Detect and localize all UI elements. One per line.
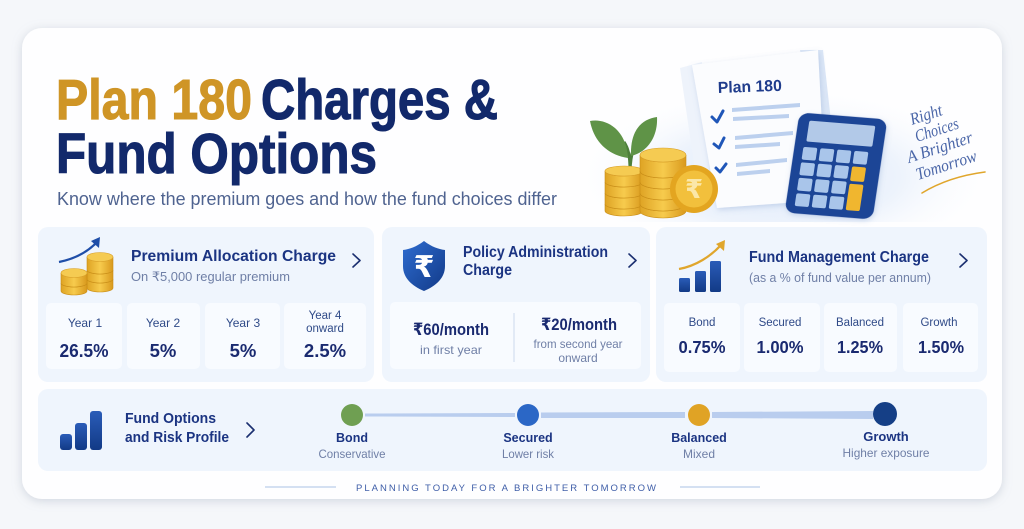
note: (as a % of fund value per annum) (749, 271, 931, 285)
fund: bond (318, 404, 386, 461)
heading: Premium Allocation Charge (131, 248, 336, 265)
title: Fund Options (56, 122, 377, 186)
icon: rupee shield (403, 241, 445, 291)
cell: year 4 onward: 2.5% (304, 340, 346, 361)
panel: fund options and risk profile (38, 389, 987, 471)
fee: first year (413, 320, 489, 357)
title (56, 68, 498, 186)
coin stacks (605, 148, 686, 218)
heading (125, 410, 229, 446)
rupee coin: ₹ (685, 174, 703, 204)
fund: growth: Growth (863, 429, 909, 444)
document: Plan 180 (718, 78, 782, 97)
note: On ₹5,000 regular premium (131, 269, 290, 284)
chevron (629, 254, 636, 267)
icon: bars (60, 411, 102, 450)
cell: year 2 (127, 303, 200, 369)
cell: year 2: 5% (150, 340, 176, 361)
subtitle: Know where the premium goes and how the fund choices differ (57, 188, 557, 209)
cell: bond: Bond (689, 317, 715, 329)
fund: bond: Bond (336, 431, 368, 445)
heading: Fund Management Charge (749, 249, 929, 266)
fee: second year onward: onward (558, 351, 598, 365)
handwritten tagline: A Brighter (903, 128, 975, 167)
heading: Policy Administration (463, 244, 608, 261)
fee box (390, 302, 641, 369)
handwritten tagline (903, 100, 980, 184)
cell: year 4 onward: Year 4 (309, 310, 342, 322)
cell: balanced: 1.25% (837, 337, 883, 357)
illustration: plan document, coins, calculator (570, 40, 995, 222)
cell: year 1: Year 1 (68, 316, 102, 330)
cell: growth (903, 303, 978, 372)
handwritten tagline: Tomorrow (913, 146, 980, 184)
fee: second year onward: ₹20/month (541, 315, 617, 334)
cell: year 3 (205, 303, 280, 369)
title: Plan 180 (56, 68, 252, 132)
document (680, 50, 832, 208)
fee: second year onward: from second year (534, 337, 622, 351)
heading: Charge (463, 262, 512, 279)
cell: secured: 1.00% (756, 337, 804, 357)
fee: first year: ₹60/month (413, 320, 489, 339)
title: Charges & (261, 68, 498, 132)
cell: year 4 onward: onward (306, 323, 344, 335)
cell: growth: 1.50% (918, 337, 964, 357)
heading: and Risk Profile (125, 429, 229, 446)
handwritten tagline: Right (907, 100, 946, 129)
fund: growth: Higher exposure (842, 446, 930, 460)
handwritten tagline: Choices (912, 114, 961, 146)
cell: year 2: Year 2 (146, 316, 180, 330)
chevron (247, 423, 254, 437)
icon: coins with arrow (59, 237, 113, 295)
fund: secured: Secured (503, 431, 553, 445)
fund: secured: Lower risk (502, 447, 555, 461)
heading: Fund Options (125, 410, 216, 427)
risk line (365, 411, 873, 419)
calculator (785, 112, 887, 220)
icon: rupee shield: ₹ (414, 251, 434, 284)
fund: balanced: Mixed (683, 447, 715, 461)
cell: secured (744, 303, 820, 372)
cell: bond: 0.75% (678, 337, 726, 357)
cell: year 3: Year 3 (226, 316, 260, 330)
cell: bond (664, 303, 740, 372)
panel: fund management charge (656, 227, 987, 382)
chevron (353, 254, 360, 267)
rupee coin (670, 165, 718, 213)
panel: policy administration charge (382, 227, 650, 382)
heading (463, 244, 608, 279)
cell: balanced: Balanced (836, 317, 884, 329)
footer tagline: PLANNING TODAY FOR A BRIGHTER TOMORROW (356, 483, 656, 494)
cell: year 1 (46, 303, 122, 369)
fund: growth (842, 402, 930, 460)
cell: growth: Growth (920, 317, 958, 329)
cell: balanced (824, 303, 897, 372)
fee: second year onward (534, 315, 622, 365)
cell: year 3: 5% (230, 340, 256, 361)
panel: premium allocation charge (38, 227, 374, 382)
cell: year 1: 26.5% (60, 340, 108, 361)
cell: year 4 onward (284, 303, 366, 369)
plant (590, 117, 657, 170)
cell: secured: Secured (759, 317, 801, 329)
fund: balanced: Balanced (671, 431, 727, 445)
fund: bond: Conservative (318, 447, 386, 461)
chevron (960, 254, 967, 267)
icon: bars with gold arrow (679, 240, 725, 292)
fund: balanced (671, 404, 727, 461)
gold underline (922, 172, 985, 193)
fee: first year: in first year (420, 343, 482, 357)
fund: secured (502, 404, 555, 461)
